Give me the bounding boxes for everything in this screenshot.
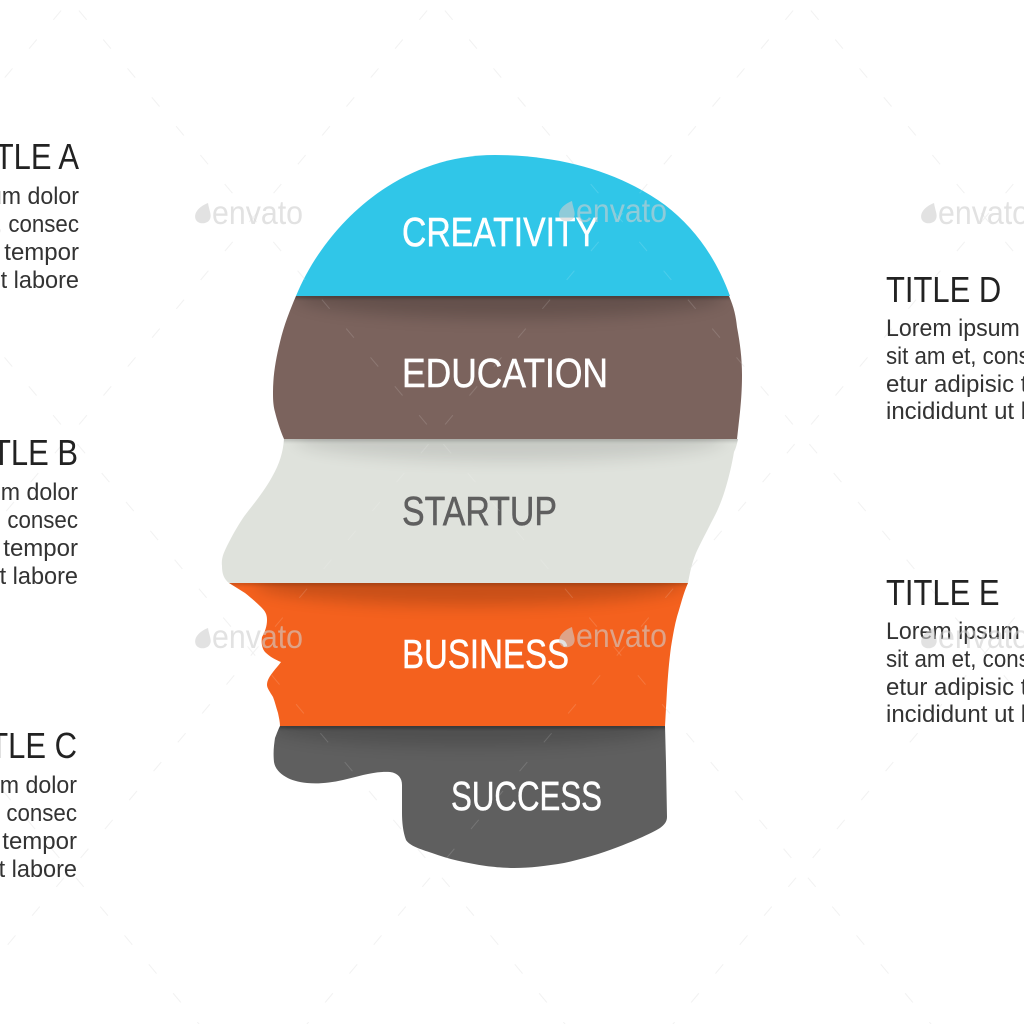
text block: title E <box>886 574 1024 728</box>
segment: business <box>229 583 688 726</box>
segment: creativity <box>296 155 730 296</box>
text block: title A <box>0 138 80 294</box>
segment: education <box>273 296 742 439</box>
envato watermarks: envato <box>212 194 303 231</box>
segment: startup: STARTUP <box>402 488 557 534</box>
head infographic <box>222 155 742 868</box>
segment: education: EDUCATION <box>402 350 608 396</box>
text block: title E: TITLE E <box>886 574 1000 614</box>
text block: title D: TITLE D <box>886 271 1001 311</box>
envato watermarks: envato <box>576 617 667 654</box>
segment: startup <box>222 439 738 583</box>
text block: title B <box>0 434 78 590</box>
envato watermarks <box>195 192 1024 655</box>
envato watermarks: envato <box>212 618 303 655</box>
segment: success: SUCCESS <box>451 773 602 819</box>
segment: success <box>274 726 667 868</box>
segment: business: BUSINESS <box>402 631 569 677</box>
envato watermarks: envato <box>576 192 667 229</box>
text block: title D <box>886 271 1024 425</box>
text block: title C <box>0 727 77 883</box>
segment: creativity: CREATIVITY <box>402 209 598 255</box>
